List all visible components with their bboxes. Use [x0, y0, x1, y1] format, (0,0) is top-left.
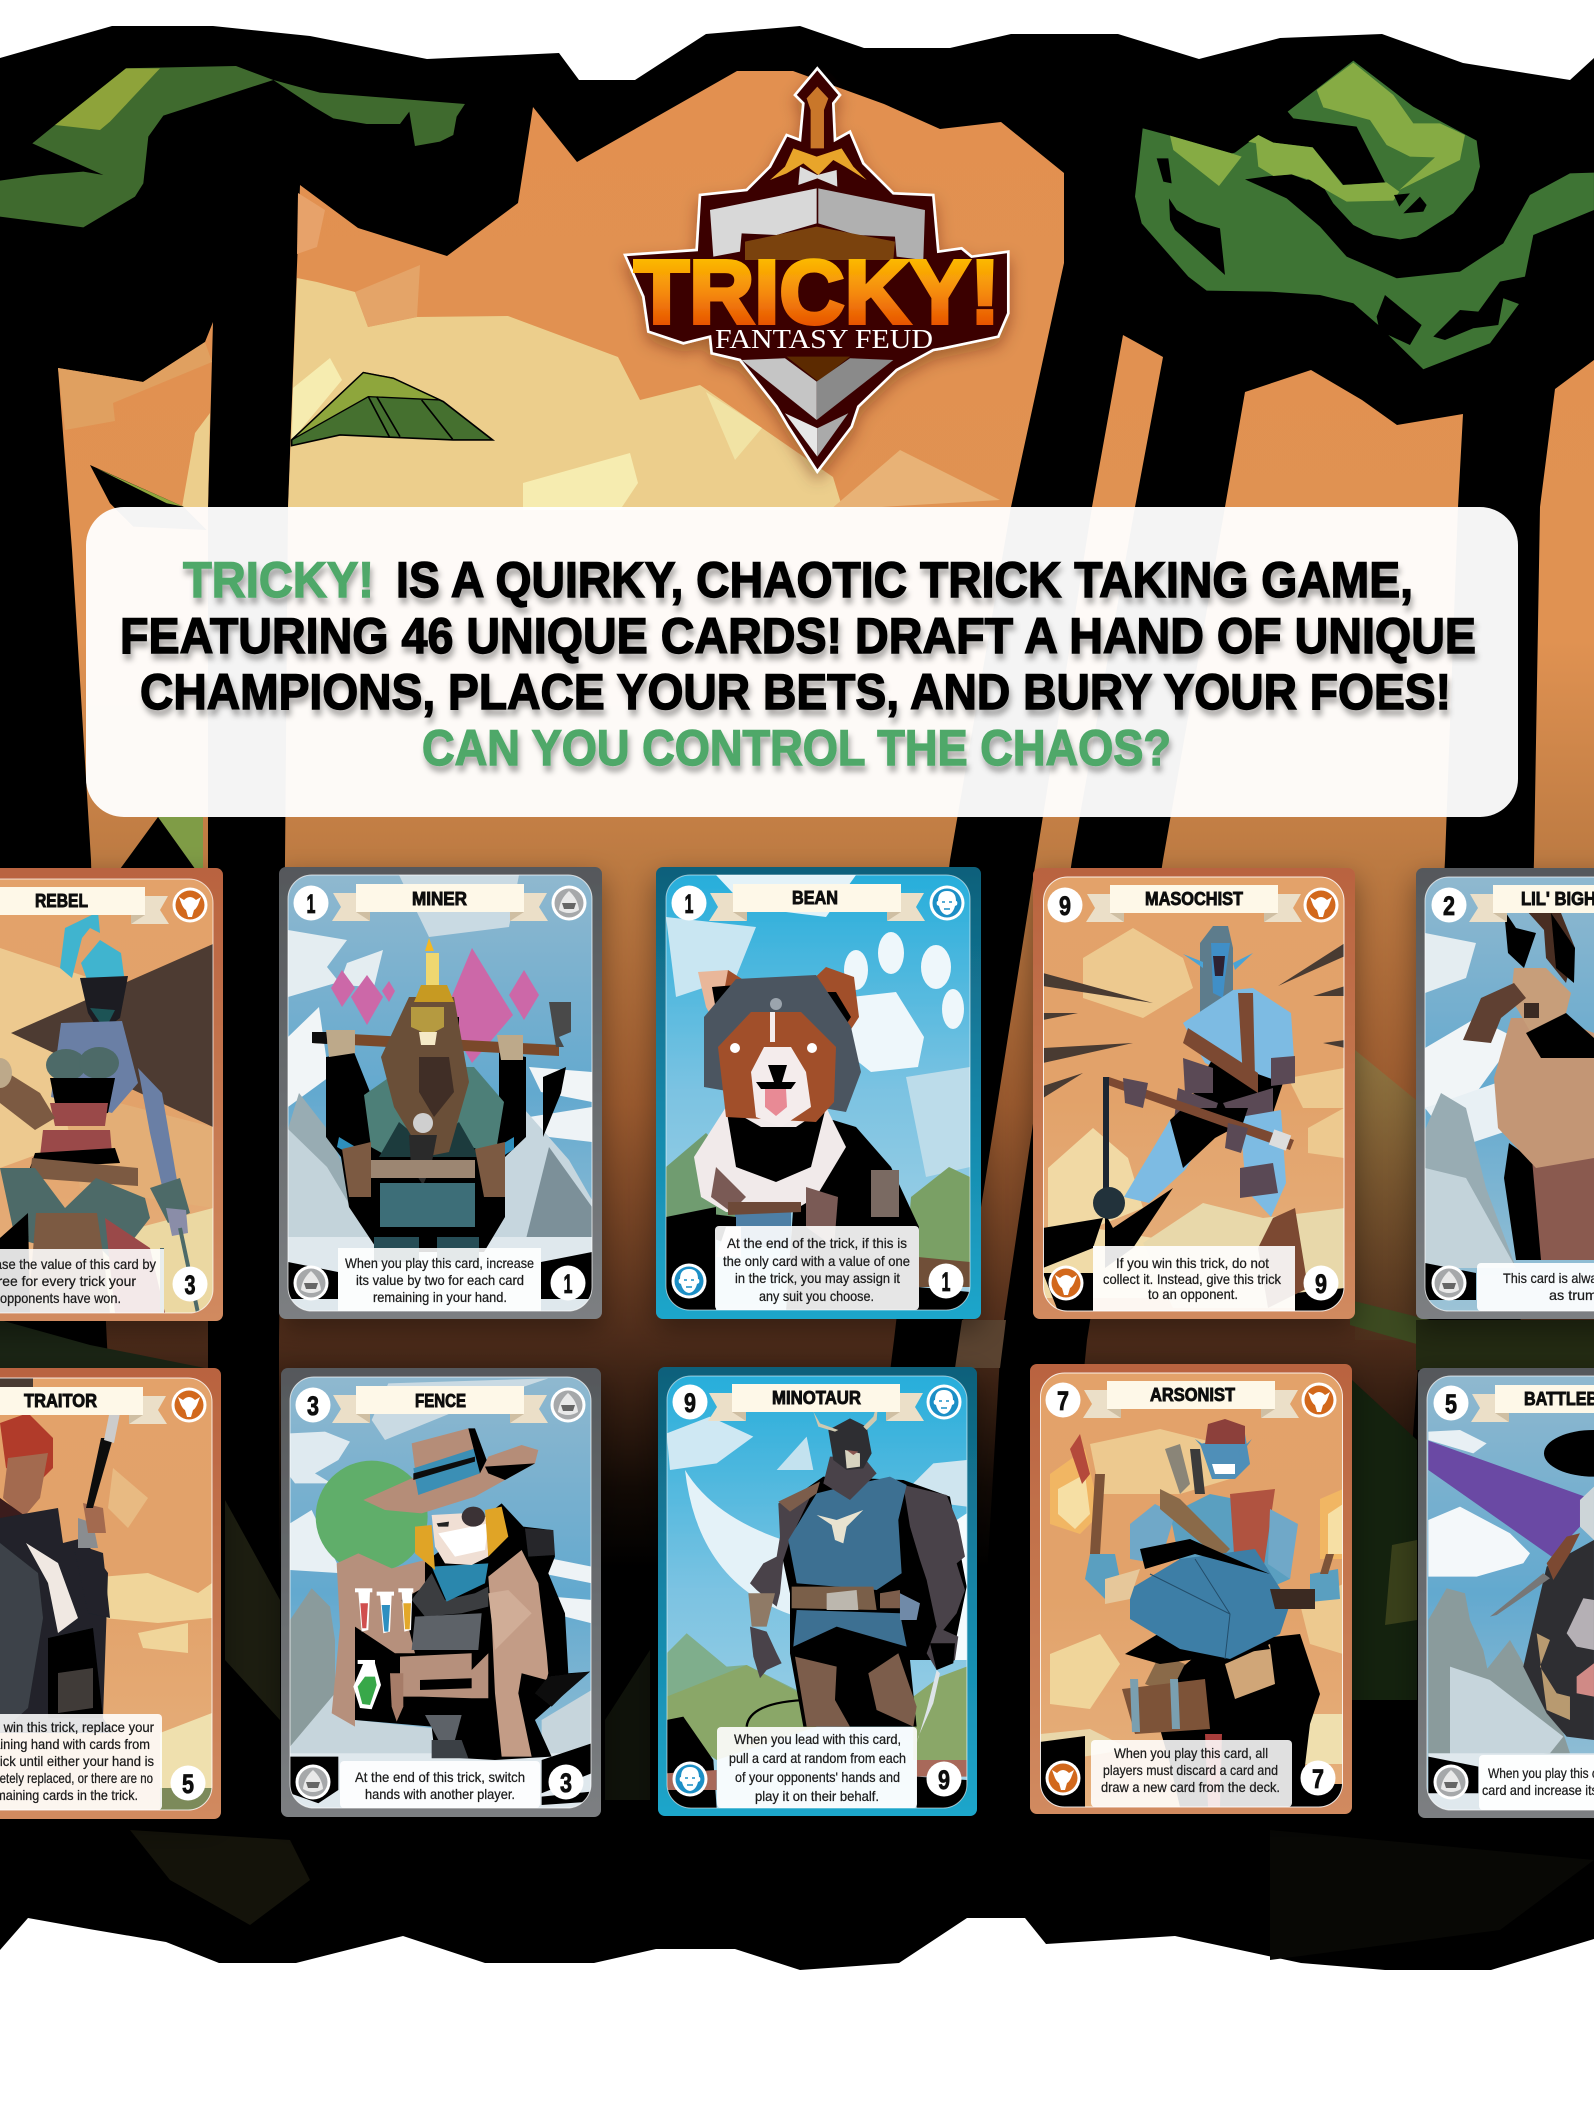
Fence ability text: At the end of this trick, switch: [355, 1769, 525, 1785]
Fence bottom value: 3: [560, 1768, 572, 1798]
Miner ability text: its value by two for each card: [356, 1272, 524, 1288]
Masochist orc character: [1093, 926, 1308, 1308]
card: Minotaur: [658, 1367, 977, 1816]
Miner value: 1: [306, 889, 316, 919]
Rebel suit icon: [172, 888, 208, 922]
Masochist title banner: [1086, 885, 1302, 922]
Bean bottom value: 1: [942, 1267, 950, 1297]
Bean ability text: [715, 1226, 919, 1310]
Miner ability text: remaining in your hand.: [373, 1289, 507, 1305]
Fence value: [296, 1388, 330, 1422]
Traitor ability text: [0, 1714, 162, 1810]
Arsonist character: [1085, 1419, 1340, 1807]
Arsonist title banner: [1083, 1381, 1299, 1418]
Miner title banner: [332, 884, 548, 921]
panel: intro text: [86, 507, 1518, 817]
Bean bottom value: [928, 1264, 964, 1298]
card: Masochist: [1033, 868, 1355, 1319]
Minotaur value: 9: [684, 1388, 696, 1418]
Fence ability text: [340, 1761, 540, 1808]
Fence title banner: [332, 1386, 548, 1423]
Masochist ability text: If you win this trick, do not: [1116, 1255, 1269, 1271]
Bean ability text: the only card with a value of one: [723, 1253, 910, 1269]
Bean ability text: At the end of the trick, if this is: [727, 1235, 907, 1251]
Bean ability text: any suit you choose.: [759, 1288, 874, 1304]
foreground leaves: [90, 373, 493, 530]
Minotaur ability text: play it on their behalf.: [755, 1788, 879, 1804]
Masochist value: 9: [1059, 891, 1071, 921]
Minotaur value: [672, 1384, 708, 1420]
Masochist bottom suit icon: [1048, 1266, 1084, 1300]
logo: Tricky! Fantasy Feud shield: [625, 68, 1008, 472]
Battleboar ability text: [1479, 1755, 1594, 1810]
Minotaur suit icon: [926, 1384, 962, 1420]
intro headline: TRICKY!: [183, 552, 374, 608]
leaf below intro panel: [112, 817, 203, 880]
Masochist ability text: [1093, 1246, 1295, 1311]
Masochist title banner: MASOCHIST: [1145, 889, 1243, 909]
Arsonist ability text: [1091, 1740, 1292, 1807]
Masochist ability text: to an opponent.: [1148, 1286, 1238, 1302]
Battleboar rider character: [1490, 1487, 1594, 1740]
Rebel title banner: [0, 887, 169, 924]
Rebel value: [172, 1266, 208, 1302]
Traitor character: [0, 1410, 120, 1733]
Bean dog character: [694, 967, 919, 1312]
Miner value: [294, 886, 328, 920]
Arsonist value: [1046, 1382, 1080, 1418]
Arsonist ability text: draw a new card from the deck.: [1101, 1779, 1280, 1795]
Battleboar bottom suit icon: [1434, 1764, 1468, 1800]
Miner ability text: [338, 1248, 541, 1311]
Masochist bottom value: [1304, 1266, 1338, 1300]
Arsonist ability text: players must discard a card and: [1103, 1762, 1278, 1778]
Rebel ability text: [0, 1249, 164, 1313]
cream clouds in the sky: [58, 193, 1416, 1368]
Fence character: [332, 1428, 590, 1760]
Traitor title banner: [0, 1387, 167, 1424]
Bean ability text: in the trick, you may assign it: [735, 1270, 900, 1286]
intro headline: [120, 552, 1476, 776]
Fence ability text: hands with another player.: [365, 1786, 515, 1802]
Minotaur bottom value: [926, 1762, 962, 1796]
Arsonist title banner: ARSONIST: [1150, 1385, 1235, 1405]
Arsonist suit icon: [1302, 1382, 1336, 1418]
Miner suit icon: [552, 886, 586, 920]
Bean bottom suit icon: [672, 1264, 706, 1298]
Rebel ability text: opponents have won.: [0, 1290, 121, 1306]
Fence value: 3: [307, 1391, 319, 1421]
Miner bottom value: 1: [564, 1269, 572, 1299]
Masochist suit icon: [1304, 888, 1338, 922]
Lil' Bighorn ram character: [1463, 910, 1594, 1260]
Arsonist ability text: When you play this card, all: [1114, 1745, 1268, 1761]
Arsonist bottom suit icon: [1046, 1760, 1080, 1796]
Battleboar value: [1434, 1386, 1468, 1420]
Arsonist bottom value: [1300, 1760, 1336, 1796]
Bean value: [672, 886, 706, 920]
orange jungle sky seen through the trees: [58, 71, 1594, 1610]
Minotaur title banner: [708, 1384, 924, 1421]
card: Arsonist: [1030, 1364, 1352, 1814]
Minotaur ability text: [717, 1727, 917, 1808]
logo subtitle: FANTASY FEUD: [715, 324, 933, 354]
card: Lil' Bighorn: [1416, 868, 1594, 1319]
intro headline: CHAMPIONS, PLACE YOUR BETS, AND BURY YOUR FOES!: [140, 664, 1451, 720]
Minotaur character: [747, 1400, 967, 1743]
Lil' Bighorn ability text: [1477, 1263, 1594, 1311]
Traitor suit icon: [172, 1388, 206, 1422]
card: Rebel: [0, 868, 223, 1321]
Rebel title banner: REBEL: [35, 891, 88, 911]
Fence title banner: FENCE: [415, 1391, 466, 1411]
Minotaur bottom suit icon: [672, 1762, 708, 1796]
Minotaur ability text: pull a card at random from each: [729, 1750, 906, 1766]
Masochist bottom value: 9: [1315, 1269, 1327, 1299]
Minotaur title banner: MINOTAUR: [772, 1388, 861, 1408]
Battleboar value: 5: [1445, 1389, 1457, 1419]
Miner title banner: MINER: [412, 889, 467, 909]
Bean suit icon: [930, 886, 964, 920]
right green canopy leaf: [1135, 61, 1594, 369]
Traitor value: 5: [182, 1769, 194, 1799]
Miner dwarf character: [312, 938, 571, 1262]
card: Bean: [656, 867, 981, 1319]
Fence bottom value: [548, 1764, 584, 1800]
Bean value: 1: [684, 889, 694, 919]
Miner bottom value: [550, 1266, 586, 1300]
Miner bottom suit icon: [294, 1266, 328, 1300]
Traitor value: [170, 1766, 206, 1800]
intro headline: FEATURING 46 UNIQUE CARDS! DRAFT A HAND OF UNIQUE: [120, 608, 1476, 664]
Lil' Bighorn title banner: [1469, 885, 1594, 922]
Rebel character: [0, 912, 198, 1313]
Minotaur bottom value: 9: [938, 1765, 950, 1795]
card: Traitor: [0, 1368, 221, 1819]
Lil' Bighorn value: [1432, 888, 1466, 922]
Arsonist value: 7: [1057, 1386, 1069, 1416]
Miner ability text: When you play this card, increase: [345, 1255, 534, 1271]
Bean title banner: [709, 884, 925, 921]
Minotaur ability text: When you lead with this card,: [734, 1731, 901, 1747]
card: Miner: [279, 867, 602, 1319]
intro headline: CAN YOU CONTROL THE CHAOS?: [422, 720, 1171, 776]
Minotaur ability text: of your opponents' hands and: [735, 1769, 900, 1785]
Battleboar title banner: [1471, 1385, 1594, 1422]
Fence bottom suit icon: [296, 1764, 330, 1800]
Lil' Bighorn bottom suit icon: [1432, 1266, 1466, 1300]
card: Fence: [281, 1368, 601, 1817]
card: Battleboar: [1418, 1368, 1594, 1818]
Rebel value: 3: [184, 1270, 196, 1300]
faint dark leaves at bottom of jungle: [0, 1300, 1594, 1960]
Masochist ability text: collect it. Instead, give this trick: [1103, 1271, 1282, 1287]
logo wordmark: TRICKY!: [634, 243, 1000, 343]
Bean title banner: BEAN: [792, 888, 838, 908]
Masochist value: [1048, 888, 1082, 922]
Lil' Bighorn value: 2: [1443, 891, 1455, 921]
left green canopy leaf: [0, 66, 465, 227]
Arsonist bottom value: 7: [1312, 1764, 1324, 1794]
intro headline: IS A QUIRKY, CHAOTIC TRICK TAKING GAME,: [396, 552, 1413, 608]
Traitor title banner: TRAITOR: [24, 1391, 97, 1411]
Fence suit icon: [550, 1388, 586, 1422]
